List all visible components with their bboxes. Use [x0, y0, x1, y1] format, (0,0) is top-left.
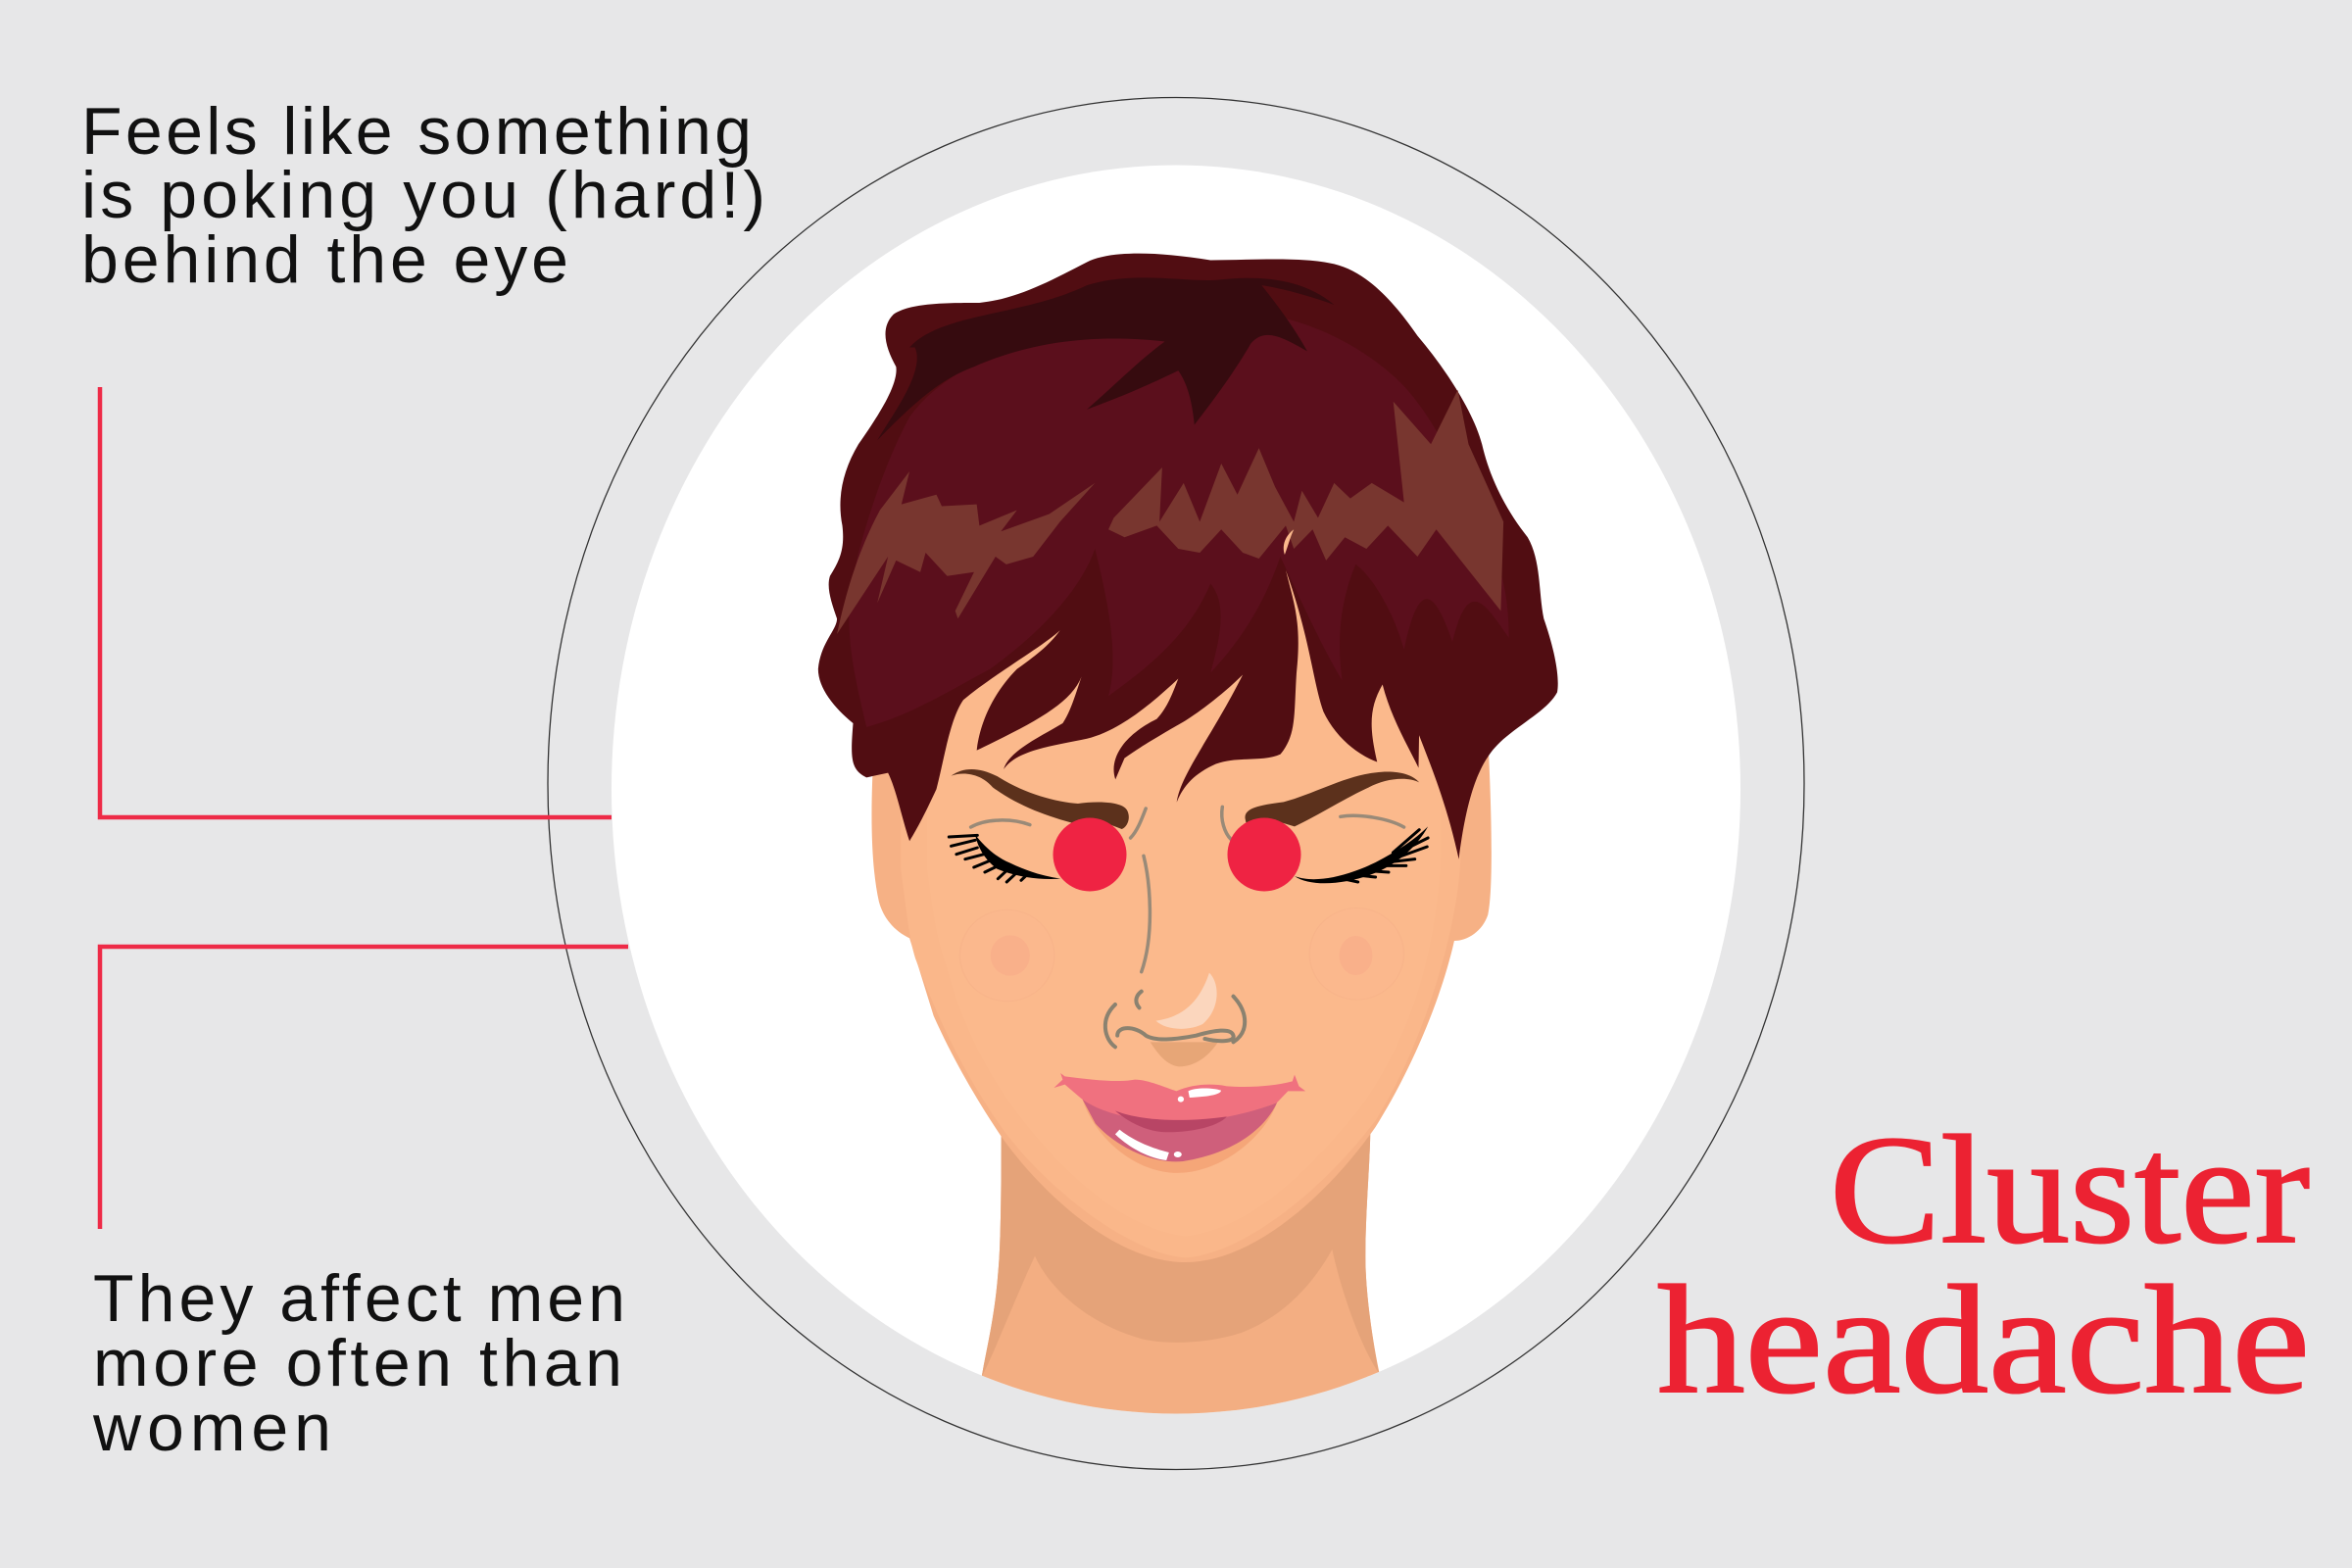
pain point: left eye [1053, 817, 1127, 892]
illustration: woman's face [818, 254, 1558, 1453]
nose [1105, 973, 1245, 1066]
title: headache [1657, 1254, 2310, 1426]
lips [1054, 1073, 1305, 1173]
white ellipse panel [612, 165, 1740, 1413]
text block: poking behind the eye: behind the eye [81, 222, 568, 297]
hair mid-tone [849, 313, 1509, 727]
facial features [949, 769, 1428, 1173]
text block: affects men more: women [92, 1391, 331, 1465]
outer ellipse outline [548, 98, 1804, 1470]
text block: poking behind the eye: Feels like something [81, 94, 752, 169]
text block: affects men more: They affect men [93, 1261, 625, 1336]
callout line: top [100, 387, 612, 817]
eyelid creases and nose bridge [971, 807, 1404, 972]
eyebrow: left [952, 769, 1129, 829]
hair [818, 254, 1558, 859]
cheek: right [1309, 908, 1404, 1000]
hair crown shadow [877, 277, 1334, 440]
cheek: left [959, 909, 1054, 1002]
eyelashes: right [1295, 826, 1428, 883]
text block: affects men more: more often than [93, 1326, 622, 1400]
eyebrow: right [1245, 771, 1419, 826]
hair highlight: left [837, 471, 1095, 634]
neck [982, 1134, 1380, 1413]
callout line: bottom [100, 947, 628, 1229]
title: Cluster [1830, 1104, 2310, 1276]
pain point: right eye [1227, 817, 1301, 892]
hair parting sliver [1284, 529, 1294, 555]
eyelashes: left [949, 835, 1060, 882]
text block: poking behind the eye: is poking you (hard!) [81, 158, 765, 232]
hair highlight: right [1108, 390, 1503, 611]
face and ears [871, 542, 1492, 1262]
